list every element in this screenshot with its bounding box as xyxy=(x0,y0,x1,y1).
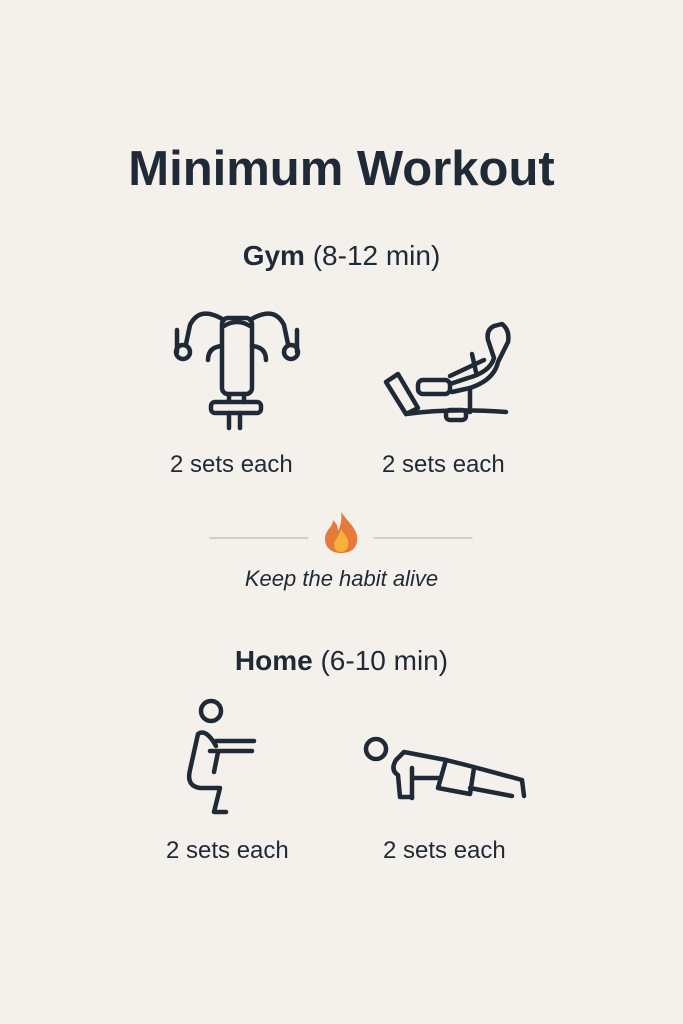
heading: gym: Gym (8-12 min) xyxy=(243,240,440,271)
icon: squat xyxy=(189,701,254,812)
captions: home xyxy=(166,837,506,864)
tagline: Keep the habit alive xyxy=(245,566,438,591)
heading: home: Home (6-10 min) xyxy=(235,645,448,676)
title: Minimum Workout xyxy=(128,142,555,196)
icon: chest press machine xyxy=(176,314,298,428)
text: 2 sets each xyxy=(170,451,293,478)
captions: gym xyxy=(170,451,505,478)
icon: push-up xyxy=(366,739,524,798)
text: 2 sets each xyxy=(166,837,289,864)
divider lines xyxy=(210,537,308,539)
icon: flame xyxy=(325,512,357,553)
icon: leg press machine xyxy=(386,324,508,420)
text: 2 sets each xyxy=(383,837,506,864)
text: 2 sets each xyxy=(382,451,505,478)
